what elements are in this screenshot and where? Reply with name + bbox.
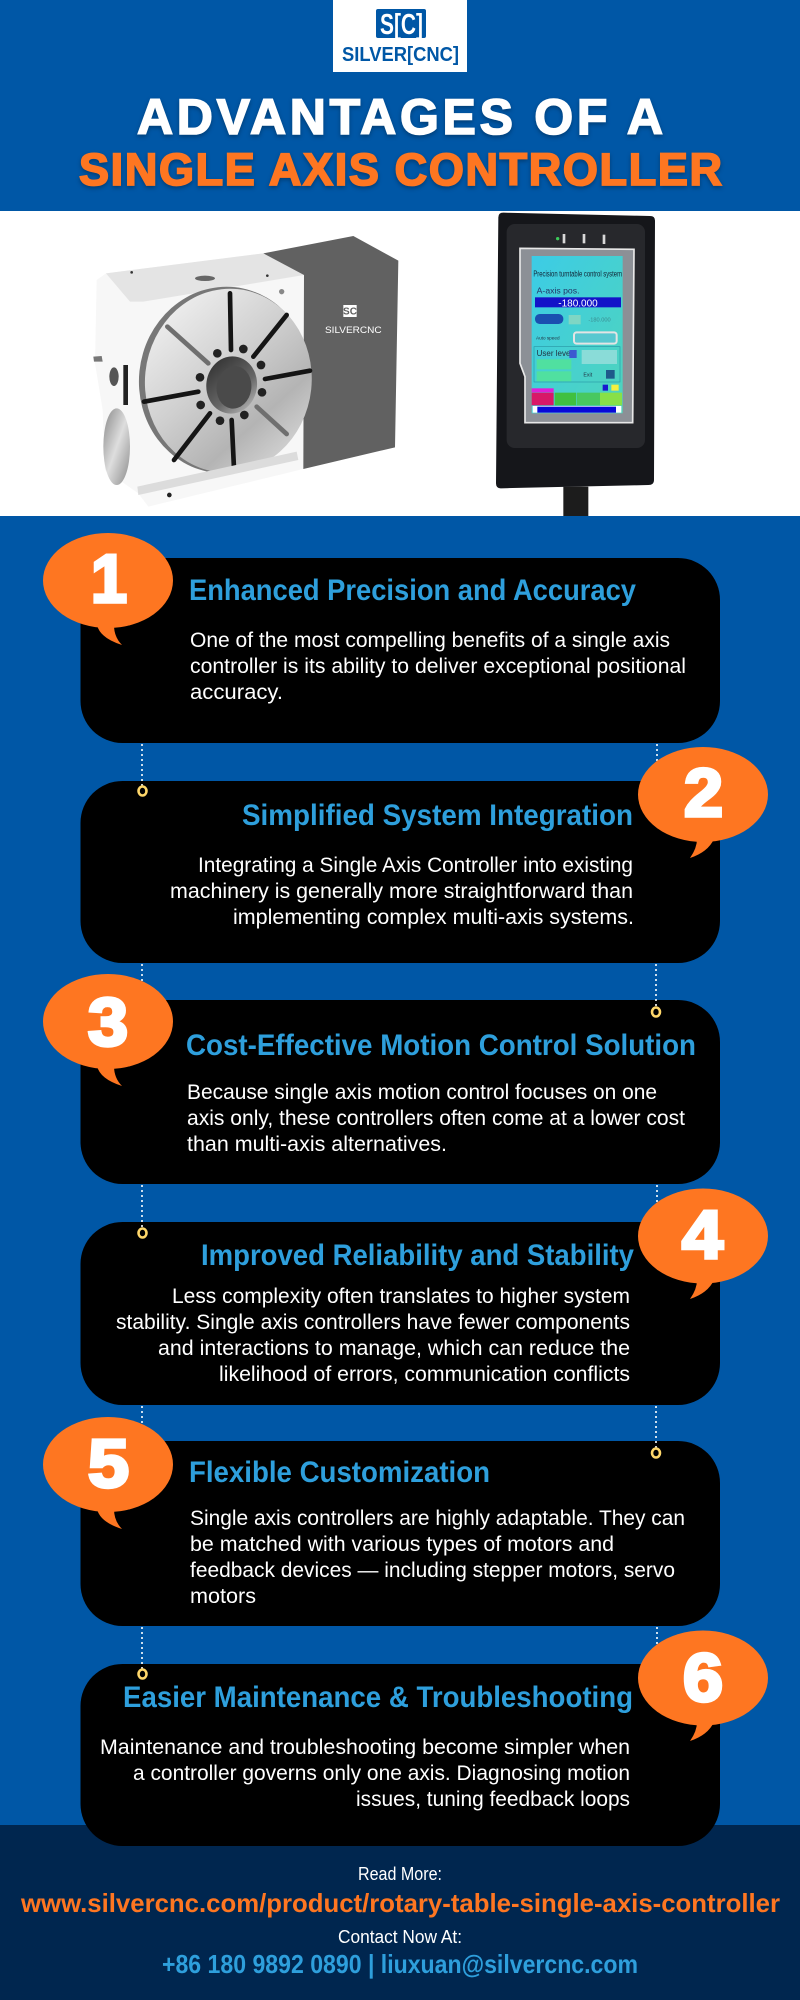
body: step 1: One of the most compelling benefits of a single axis [190, 629, 670, 652]
image: controller pendant: User level [537, 349, 572, 358]
panel: step 5 [80, 1441, 720, 1626]
body: step 5 [190, 1507, 685, 1608]
panel: step 6 [80, 1664, 720, 1846]
body: step 1: controller is its ability to deliver exceptional positional [190, 655, 686, 678]
panel: step 3 [80, 1000, 720, 1184]
logo: SILVER[CNC] [342, 44, 459, 66]
body: step 4: Less complexity often translates to higher system [172, 1285, 630, 1308]
body: step 5: motors [190, 1585, 256, 1608]
badge: number 5: 5 [88, 1426, 129, 1502]
body: step 4: stability. Single axis controllers have fewer components [116, 1311, 630, 1334]
image: rotary table [93, 236, 398, 507]
body: step 2: machinery is generally more straightforward than [170, 880, 633, 903]
body: step 3: Because single axis motion control focuses on one [187, 1081, 657, 1104]
body: step 4 [116, 1285, 630, 1386]
panel: product photos [0, 211, 800, 516]
image: rotary table: SILVERCNC [325, 325, 382, 335]
footer: contact label: Contact Now At: [338, 1927, 462, 1947]
heading: step 1: Enhanced Precision and Accuracy [189, 574, 637, 607]
badge: number 6: 6 [683, 1640, 723, 1716]
image: controller pendant: Auto speed [536, 335, 560, 340]
badge: number 3 [43, 974, 173, 1086]
logo: S[C] [380, 9, 423, 41]
body: step 1 [190, 629, 686, 704]
body: step 4: and interactions to manage, which can reduce the [158, 1337, 630, 1360]
title: ADVANTAGES OF A [137, 89, 663, 145]
heading: step 6: Easier Maintenance & Troubleshooting [123, 1681, 633, 1714]
body: step 3 [187, 1081, 685, 1156]
image: controller pendant: Exit [583, 373, 593, 379]
image: controller pendant: A-axis pos. [537, 285, 579, 295]
body: step 3: than multi-axis alternatives. [187, 1133, 447, 1156]
badge: number 3: 3 [88, 984, 128, 1060]
badge: number 1 [43, 533, 173, 645]
title: SINGLE AXIS CONTROLLER [79, 144, 722, 195]
title [79, 89, 722, 195]
badge: number 1: 1 [91, 541, 127, 617]
body: step 4: likelihood of errors, communication conflicts [219, 1363, 630, 1386]
body: step 6 [100, 1736, 630, 1811]
badge: number 4: 4 [682, 1197, 723, 1273]
heading: step 2: Simplified System Integration [242, 799, 633, 832]
body: step 2: implementing complex multi-axis systems. [233, 906, 634, 929]
footer: website url: www.silvercnc.com/product/rotary-table-single-axis-controller [20, 1888, 780, 1918]
body: step 6: a controller governs only one axis. Diagnosing motion [133, 1762, 630, 1785]
heading: step 3: Cost-Effective Motion Control Solution [186, 1029, 696, 1062]
connectors between steps [138, 744, 660, 1678]
image: controller pendant: Precision turntable control system [533, 269, 622, 279]
body: step 6: issues, tuning feedback loops [356, 1788, 630, 1811]
footer: phone and email: +86 180 9892 0890 | liuxuan@silvercnc.com [162, 1949, 638, 1979]
badge: number 2 [638, 747, 768, 858]
body: step 5: feedback devices — including stepper motors, servo [190, 1559, 675, 1582]
image: rotary table: SC [343, 307, 357, 318]
badge: number 2: 2 [684, 755, 723, 831]
panel: step 4 [80, 1222, 720, 1405]
badge: number 5 [43, 1417, 173, 1529]
body: step 1: accuracy. [190, 681, 283, 704]
body: step 2 [170, 854, 634, 929]
badge: number 4 [638, 1188, 768, 1299]
body: step 5: be matched with various types of motors and [190, 1533, 614, 1556]
footer: read more label: Read More: [358, 1864, 442, 1884]
badge: number 6 [638, 1630, 768, 1741]
body: step 5: Single axis controllers are highly adaptable. They can [190, 1507, 685, 1530]
body: step 3: axis only, these controllers often come at a lower cost [187, 1107, 685, 1130]
heading: step 4: Improved Reliability and Stability [201, 1239, 635, 1272]
panel: step 2 [80, 781, 720, 963]
image: controller pendant: -180.000 [558, 298, 598, 309]
image: controller pendant [496, 213, 655, 516]
body: step 2: Integrating a Single Axis Controller into existing [198, 854, 633, 877]
panel: step 1 [80, 558, 720, 743]
image: controller pendant: -180.000 [588, 318, 611, 324]
footer background [0, 1825, 800, 2000]
logo [333, 0, 467, 72]
heading: step 5: Flexible Customization [189, 1456, 490, 1489]
body: step 6: Maintenance and troubleshooting become simpler when [100, 1736, 630, 1759]
